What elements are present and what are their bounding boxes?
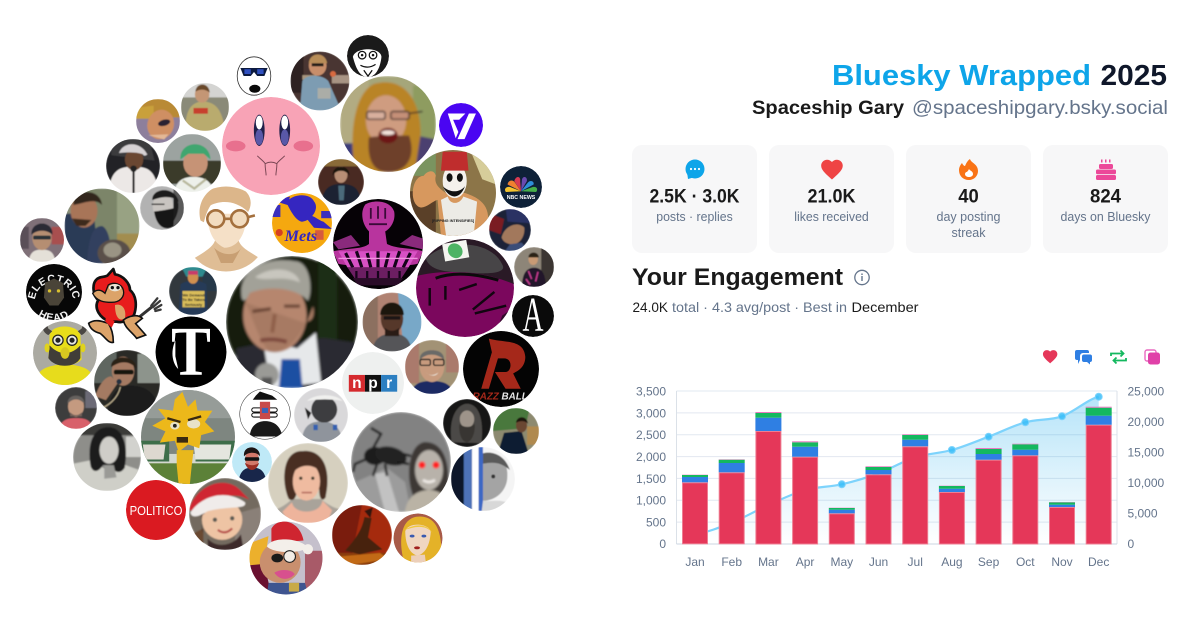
- avatar: black and white drawing: [347, 35, 389, 77]
- avatar: spider and woman with red eyes: [351, 412, 451, 512]
- left axis labels: 2,500: [636, 428, 666, 442]
- panel: likes received: 21.0K: [808, 186, 856, 208]
- avatar: magenta fist engraving: [333, 199, 423, 289]
- avatar: Razzball R logo: BALL: [502, 391, 528, 402]
- left axis labels: 500: [646, 516, 666, 530]
- avatar: blond kid: [290, 52, 350, 110]
- x axis labels: Feb: [721, 555, 742, 569]
- avatar: man with glasses: [20, 218, 65, 262]
- avatar bubble cluster: [20, 35, 554, 594]
- profile name and handle: [752, 97, 1168, 119]
- avatar: lightsaber man: [451, 447, 515, 511]
- engagement summary: December: [852, 299, 919, 315]
- avatar: child in santa hat: [189, 478, 261, 550]
- avatar: Mets illustration: [272, 193, 332, 253]
- avatar: man holding protest sign: To Be Taken: [182, 298, 205, 302]
- avatar: NBC News: [500, 166, 542, 208]
- avatar: man holding protest sign: [169, 267, 217, 315]
- avatar: man in red shirt: [55, 387, 97, 429]
- avatar: man seated at laptop: [493, 408, 539, 454]
- avatar: Gary Johnson: [226, 256, 358, 393]
- panel: likes received: likes received: [794, 210, 869, 224]
- left axis labels: 1,000: [636, 494, 666, 508]
- avatar: long-haired bearded man: [443, 399, 491, 447]
- avatar: clown muscle cartoon: [RIPPING INTENSIFIES]: [432, 219, 475, 223]
- avatar: sunglasses sketch: [236, 56, 272, 96]
- x axis labels: Jan: [685, 555, 705, 569]
- title: 2025: [1100, 60, 1167, 92]
- x axis labels: Oct: [1016, 555, 1035, 569]
- right axis labels: 0: [1128, 537, 1134, 551]
- icon: legend quotes: [1145, 350, 1160, 364]
- avatar: smiling man with glasses: [405, 340, 459, 394]
- panel: posts and replies: posts · replies: [656, 210, 733, 224]
- cumulative line: [695, 397, 1099, 534]
- avatar: NBC News: NBC NEWS: [507, 195, 536, 201]
- left axis labels: 3,000: [636, 406, 666, 420]
- panel: day posting streak: 40: [958, 186, 979, 208]
- avatar: New York Times T: [156, 314, 226, 391]
- quotes bars: [682, 407, 1112, 508]
- avatar: sunglasses man on blue: [232, 442, 272, 482]
- icon: info: [855, 270, 869, 285]
- profile name and handle: Spaceship Gary: [752, 97, 904, 119]
- x axis labels: Aug: [941, 555, 963, 569]
- icon: chat bubble: [686, 160, 704, 179]
- avatar: clown muscle cartoon: [410, 150, 496, 236]
- panel: posts and replies: [632, 145, 757, 253]
- avatar: man holding protest sign: We Demand: [183, 293, 205, 297]
- avatar: Politico logo: POLITICO: [130, 503, 182, 518]
- avatar: Razzball R logo: RAZZ: [473, 391, 500, 402]
- avatar: purple V logo: [439, 103, 483, 147]
- panel: day posting streak: day posting: [936, 210, 1001, 224]
- avatar: NPR logo: r: [386, 375, 392, 392]
- avatar: skull with sunglasses: [136, 99, 180, 144]
- avatar: Mets illustration: Mets: [284, 227, 317, 245]
- avatar: man in green helmet: [163, 134, 221, 192]
- panel: days on Bluesky: 824: [1090, 186, 1121, 208]
- avatar: cartoon blonde woman: [394, 514, 442, 562]
- reposts bars: [682, 408, 1112, 510]
- engagement summary: total · 4.3 avg/post · Best in: [672, 299, 847, 315]
- profile name and handle: @spaceshipgary.bsky.social: [912, 97, 1168, 119]
- right axis labels: 15,000: [1128, 446, 1165, 460]
- x axis labels: Dec: [1088, 555, 1109, 569]
- avatar: onion cartoon: [416, 239, 514, 337]
- left axis labels: [636, 384, 666, 551]
- avatar: woman black and white: [73, 423, 141, 491]
- grid: [676, 391, 1117, 544]
- x axis labels: Nov: [1051, 555, 1073, 569]
- avatar: The Atlantic A: A: [522, 288, 544, 342]
- avatar: NPR logo: n: [352, 375, 362, 392]
- panel: days on Bluesky: [1043, 145, 1168, 253]
- avatar: New York Times T: T: [171, 314, 211, 391]
- avatar: man holding protest sign: Seriously: [185, 303, 203, 307]
- avatar: The Atlantic A: [512, 295, 554, 337]
- left axis labels: 0: [659, 537, 666, 551]
- right axis labels: 5,000: [1128, 506, 1158, 520]
- icon: heart: [821, 160, 843, 180]
- right axis labels: 20,000: [1128, 415, 1165, 429]
- avatar: bearded man black and white: [140, 186, 184, 230]
- avatar: cat in hoodie: [294, 388, 348, 442]
- x axis labels: Jun: [869, 555, 888, 569]
- likes bars: [682, 425, 1111, 544]
- icon: cake: [1096, 160, 1116, 180]
- left axis labels: 1,500: [636, 472, 666, 486]
- avatar: man portrait outdoors: [362, 292, 422, 352]
- avatar: Electric Head logo: HEAD: [38, 310, 68, 320]
- avatar: Kirby: [222, 97, 320, 195]
- icon: flame: [959, 159, 978, 180]
- avatar: man in white cap with microphone: [106, 139, 160, 193]
- avatar: man on telephone: [94, 350, 160, 416]
- avatar: NPR logo: [342, 352, 404, 414]
- left axis labels: 2,000: [636, 450, 666, 464]
- x axis labels: Jul: [908, 555, 923, 569]
- engagement summary: 24.0K: [632, 299, 669, 315]
- avatar: Electric Head logo: ELECTRIC: [28, 274, 80, 299]
- avatar: red monkey with fork mascot: [89, 269, 161, 342]
- panel: likes received: [769, 145, 894, 253]
- avatar: Razzball R logo: [463, 331, 539, 407]
- icon: legend likes: [1043, 350, 1057, 363]
- icon: legend reposts: [1111, 350, 1126, 364]
- right axis labels: [1128, 384, 1165, 551]
- avatar: woman in colorful jacket: [514, 247, 554, 287]
- replies bars: [682, 416, 1112, 513]
- avatar: cartoon woman portrait: [268, 443, 348, 523]
- chart legend icons: [1043, 350, 1160, 364]
- right axis labels: 10,000: [1128, 476, 1165, 490]
- left axis labels: 3,500: [636, 384, 666, 398]
- avatar: Electric Head logo: [26, 264, 82, 320]
- avatar: yellow sun mascot: [141, 390, 235, 484]
- cumulative area: [695, 397, 1099, 544]
- avatar: hat figure drawing: [240, 388, 290, 440]
- panel: days on Bluesky: days on Bluesky: [1060, 210, 1151, 224]
- avatar: dark red statue scene: [332, 505, 392, 565]
- x axis labels: May: [830, 555, 853, 569]
- avatar: yellow horned cartoon: [33, 321, 97, 385]
- avatar: Politico logo: [126, 480, 186, 540]
- x axis labels: Mar: [758, 555, 779, 569]
- avatar: man in dark jacket: [318, 159, 364, 205]
- avatar: illustrated bust with glasses: [194, 186, 258, 272]
- icon: legend replies: [1075, 350, 1092, 364]
- heading: Your Engagement: Your Engagement: [632, 264, 843, 291]
- avatar: NPR logo: p: [368, 375, 378, 392]
- right axis labels: 25,000: [1128, 384, 1165, 398]
- chart: monthly engagement stacked bars with cumulative line: [636, 384, 1165, 569]
- x axis labels: Apr: [796, 555, 814, 569]
- panel: posts and replies: 2.5K · 3.0K: [650, 186, 740, 208]
- panel: day posting streak: [906, 145, 1031, 253]
- avatar: smiling man outdoors: [64, 188, 140, 266]
- x axis labels: [685, 555, 1109, 569]
- avatar: painted man with long hair and beard: [340, 76, 436, 172]
- x axis labels: Sep: [978, 555, 1000, 569]
- title: Bluesky Wrapped: [832, 60, 1091, 92]
- panel: day posting streak: streak: [952, 226, 986, 240]
- engagement summary: [632, 299, 919, 315]
- avatar: santa cartoon bear: [250, 522, 322, 594]
- cumulative line points: [838, 393, 1102, 488]
- avatar: red dimly lit man: [489, 209, 531, 251]
- avatar: race driver: [181, 83, 229, 131]
